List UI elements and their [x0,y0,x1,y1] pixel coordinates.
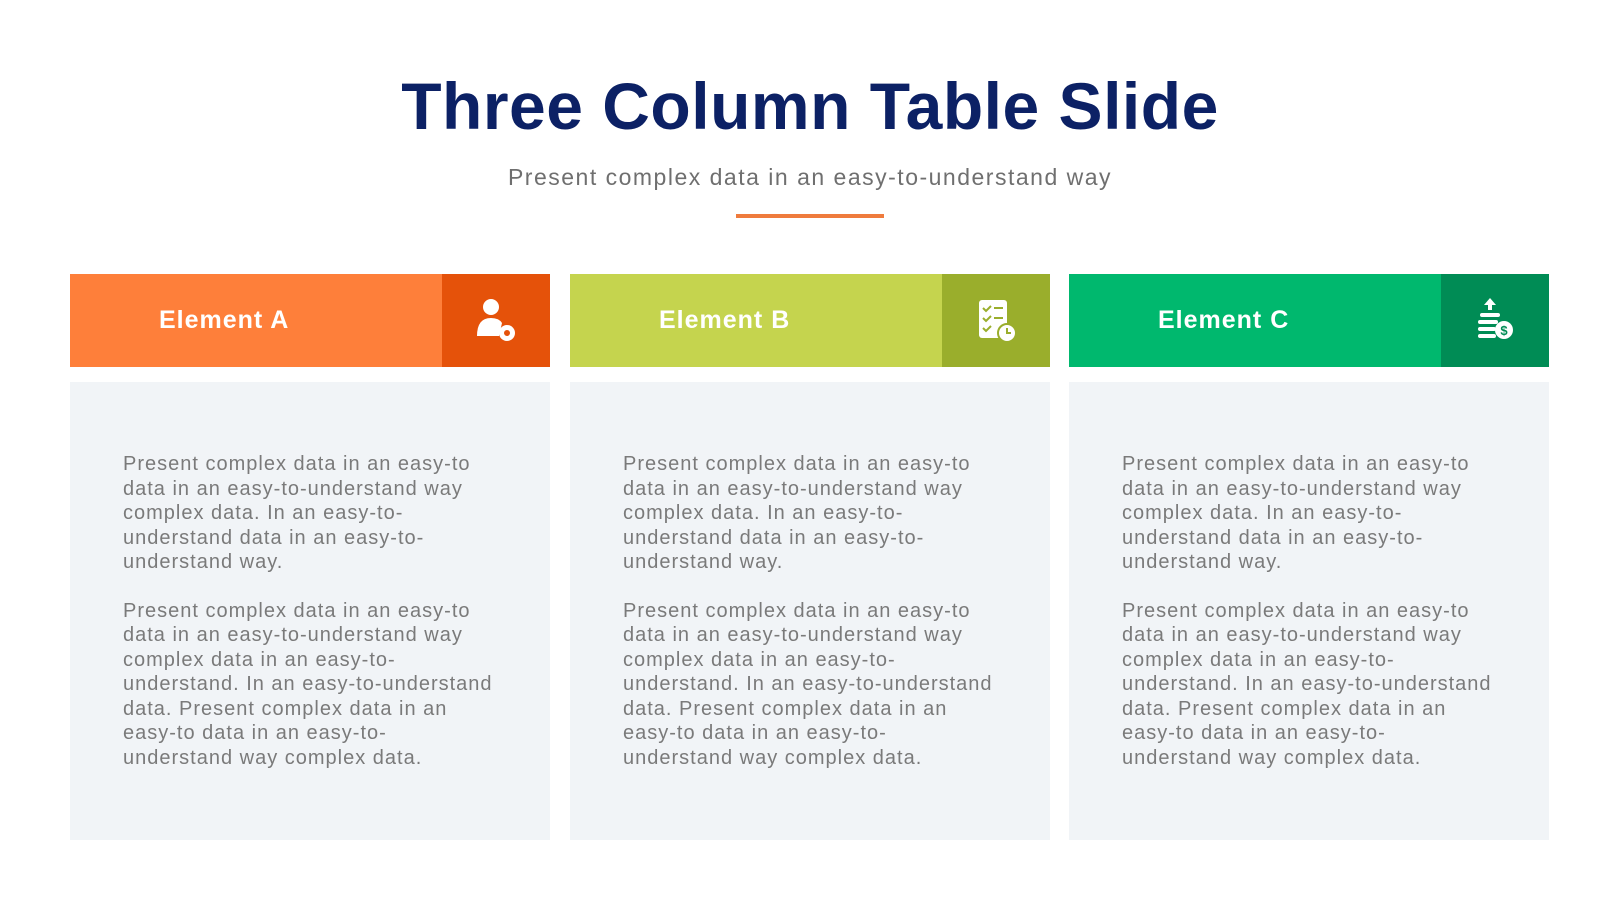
panel: A body: understand way complex data. [123,746,422,768]
panel: B body: understand way complex data. [623,746,922,768]
subtitle: Present complex data in an easy-to-understand way [508,164,1112,190]
panel: C body: Present complex data in an easy-to [1122,453,1470,475]
panel: A body: Present complex data in an easy-to [123,453,471,475]
header: Element B: Element B [659,306,790,334]
header: Element B [570,274,1050,367]
header: Element A: Element A [159,306,289,334]
panel: A body: data in an easy-to-understand way [123,624,463,646]
panel: B body: complex data in an easy-to- [623,648,896,670]
icon: coins dollar [1441,274,1549,367]
panel: B body: data in an easy-to-understand way [623,478,963,500]
panel: C body: understand data in an easy-to- [1122,526,1423,548]
panel: B body: understand data in an easy-to- [623,526,924,548]
panel: A body: data. Present complex data in an [123,698,447,720]
panel: C body: data in an easy-to-understand way [1122,624,1462,646]
icon: coins dollar: $ [1500,322,1508,338]
panel: A body: easy-to data in an easy-to- [123,722,387,744]
panel: C body: complex data. In an easy-to- [1122,502,1402,524]
panel: B body: Present complex data in an easy-to [623,600,971,622]
title: Three Column Table Slide [401,69,1219,143]
panel: B body: complex data. In an easy-to- [623,502,903,524]
panel: A body: understand data in an easy-to- [123,526,424,548]
panel: B body: data in an easy-to-understand way [623,624,963,646]
panel: A body: complex data in an easy-to- [123,648,396,670]
panel: A body: data in an easy-to-understand way [123,478,463,500]
panel: C body: data. Present complex data in an [1122,698,1446,720]
panel: B body: easy-to data in an easy-to- [623,722,887,744]
header: Element C [1069,274,1549,367]
panel: C body: understand. In an easy-to-understand [1122,673,1492,695]
header: Element C: Element C [1158,306,1289,334]
accent line [736,214,884,218]
panel: C body [1069,382,1549,840]
panel: B body [570,382,1050,840]
header: Element A [70,274,550,367]
panel: A body [70,382,550,840]
panel: C body: data in an easy-to-understand way [1122,478,1462,500]
panel: C body: easy-to data in an easy-to- [1122,722,1386,744]
panel: A body: understand. In an easy-to-understand [123,673,493,695]
panel: B body: data. Present complex data in an [623,698,947,720]
panel: C body: complex data in an easy-to- [1122,648,1395,670]
icon: user gear [442,274,550,367]
panel: C body: understand way complex data. [1122,746,1421,768]
panel: B body: understand. In an easy-to-understand [623,673,993,695]
panel: C body: understand way. [1122,551,1282,573]
panel: B body: understand way. [623,551,783,573]
panel: C body: Present complex data in an easy-to [1122,600,1470,622]
panel: B body: Present complex data in an easy-to [623,453,971,475]
panel: A body: understand way. [123,551,283,573]
panel: A body: Present complex data in an easy-to [123,600,471,622]
panel: A body: complex data. In an easy-to- [123,502,403,524]
icon: checklist clock [942,274,1050,367]
